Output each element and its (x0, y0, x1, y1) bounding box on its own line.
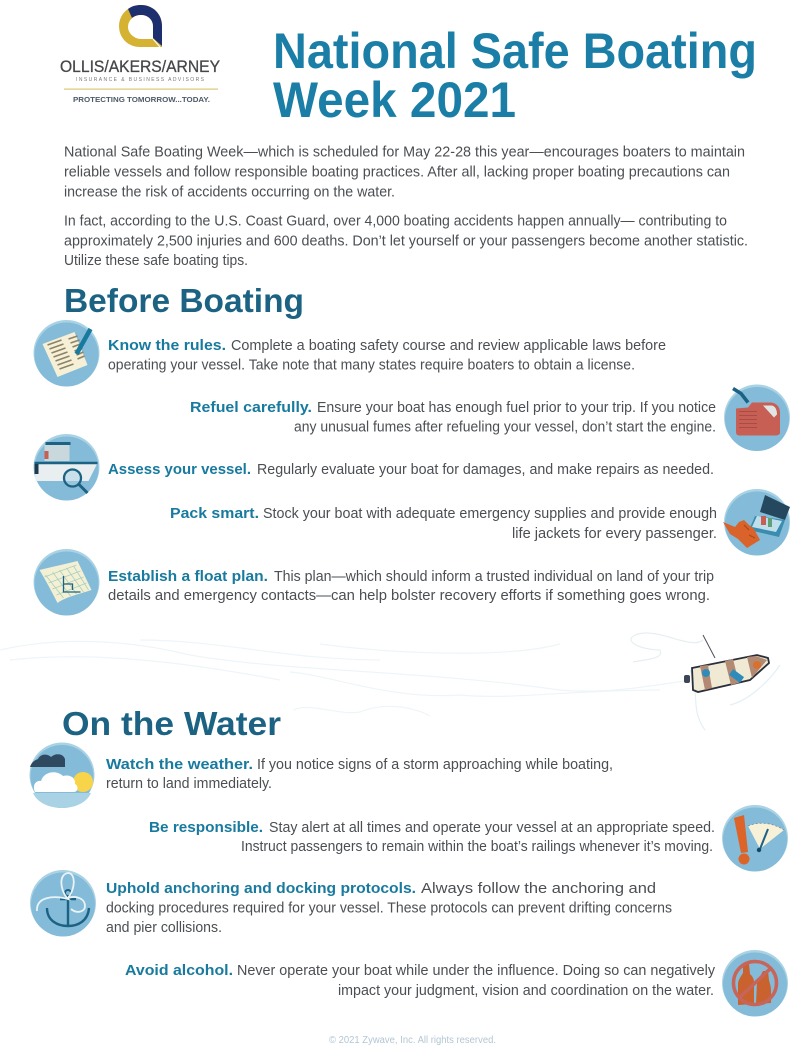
tip: uphold anchoring and docking protocols: and pier collisions. (106, 920, 222, 936)
tip: establish a float plan: Establish a float plan. (108, 569, 268, 585)
icon: red fuel can (724, 384, 790, 451)
tip: avoid alcohol (125, 963, 716, 999)
tip: watch the weather: If you notice signs of a storm approaching while boating, (257, 757, 613, 773)
intro paragraph two: approximately 2,500 injuries and 600 deaths. Don’t let yourself or your passengers become another statistic. (64, 234, 748, 250)
logo: Ollis Akers Arney (60, 5, 220, 104)
boat wake illustration (0, 633, 780, 730)
icon: motorboat from above (684, 635, 769, 692)
icon: anchor and rope (30, 870, 96, 936)
heading: On the Water: On the Water (62, 705, 281, 742)
intro paragraph one: National Safe Boating Week—which is scheduled for May 22-28 this year—encourages boaters to maintain (64, 144, 745, 160)
intro paragraph one: increase the risk of accidents occurring on the water. (64, 184, 395, 200)
tip: know the rules: Complete a boating safety course and review applicable laws before (231, 338, 666, 354)
tip: assess your vessel: Regularly evaluate your boat for damages, and make repairs as needed. (257, 462, 714, 478)
tip: avoid alcohol: Never operate your boat while under the influence. Doing so can negatively (237, 963, 716, 979)
icon: float plan map (34, 549, 100, 616)
intro paragraph two (64, 214, 748, 269)
tip: watch the weather: return to land immediately. (106, 776, 272, 792)
tip: refuel carefully: Ensure your boat has enough fuel prior to your trip. If you notice (317, 400, 716, 416)
tip: refuel carefully: Refuel carefully. (190, 400, 312, 416)
icon: weather clouds and sun (30, 742, 94, 808)
tip: be responsible: Stay alert at all times and operate your vessel at an appropriate speed. (269, 820, 715, 836)
icon: rules document and pen (34, 320, 100, 386)
tip: be responsible: Instruct passengers to remain within the boat’s railings whenever it’s moving. (241, 839, 713, 855)
tip: refuel carefully: any unusual fumes after refueling your vessel, don’t start the engine. (294, 420, 716, 436)
tip: uphold anchoring and docking protocols: Always follow the anchoring and (421, 881, 656, 897)
tip: avoid alcohol: Avoid alcohol. (125, 963, 233, 979)
tip: be responsible: Be responsible. (149, 820, 263, 836)
tip: be responsible (149, 820, 715, 855)
title: National Safe Boating (273, 23, 757, 79)
tip: uphold anchoring and docking protocols: Uphold anchoring and docking protocols. (106, 881, 416, 897)
intro paragraph two: In fact, according to the U.S. Coast Guard, over 4,000 boating accidents happen annually— contributing to (64, 214, 727, 230)
tip: pack smart (170, 506, 717, 542)
company name: OLLIS/AKERS/ARNEY (60, 57, 220, 76)
icon: life jackets and emergency kit (723, 489, 790, 556)
intro paragraph one (64, 144, 745, 200)
title: Week 2021 (273, 72, 516, 128)
tagline: PROTECTING TOMORROW...TODAY. (73, 97, 210, 104)
tip: know the rules (108, 338, 666, 374)
tip: assess your vessel: Assess your vessel. (108, 462, 251, 478)
logo mark (119, 5, 162, 47)
heading: Before Boating: Before Boating (64, 282, 304, 319)
icon: boat with magnifying glass (34, 434, 100, 500)
tip: watch the weather: Watch the weather. (106, 757, 253, 773)
tip: pack smart: life jackets for every passenger. (512, 526, 717, 542)
title (273, 23, 757, 128)
company descriptor: INSURANCE & BUSINESS ADVISORS (76, 77, 205, 83)
tip: establish a float plan: This plan—which should inform a trusted individual on land of your trip (274, 569, 714, 585)
tip: pack smart: Pack smart. (170, 506, 259, 522)
tip: uphold anchoring and docking protocols (106, 881, 672, 936)
icon: no alcohol bottles (722, 950, 788, 1016)
tip: know the rules: Know the rules. (108, 338, 226, 354)
tip: watch the weather (106, 757, 613, 792)
logo rule (64, 88, 218, 90)
tip: pack smart: Stock your boat with adequate emergency supplies and provide enough (263, 506, 717, 522)
tip: avoid alcohol: impact your judgment, vision and coordination on the water. (338, 983, 714, 999)
tip: establish a float plan (108, 569, 714, 604)
tip: uphold anchoring and docking protocols: docking procedures required for your vessel. These protocols can prevent drifting concerns (106, 900, 672, 916)
tip: know the rules: operating your vessel. Take note that many states require boaters to obtain a license. (108, 358, 635, 374)
intro paragraph one: reliable vessels and follow responsible boating practices. After all, lacking proper boating precautions can (64, 164, 730, 180)
tip: establish a float plan: details and emergency contacts—can help bolster recovery efforts if something goes wrong. (108, 588, 710, 604)
icon: speed gauge and exclamation mark (722, 805, 788, 872)
tip: refuel carefully (190, 400, 716, 436)
intro paragraph two: Utilize these safe boating tips. (64, 253, 248, 269)
